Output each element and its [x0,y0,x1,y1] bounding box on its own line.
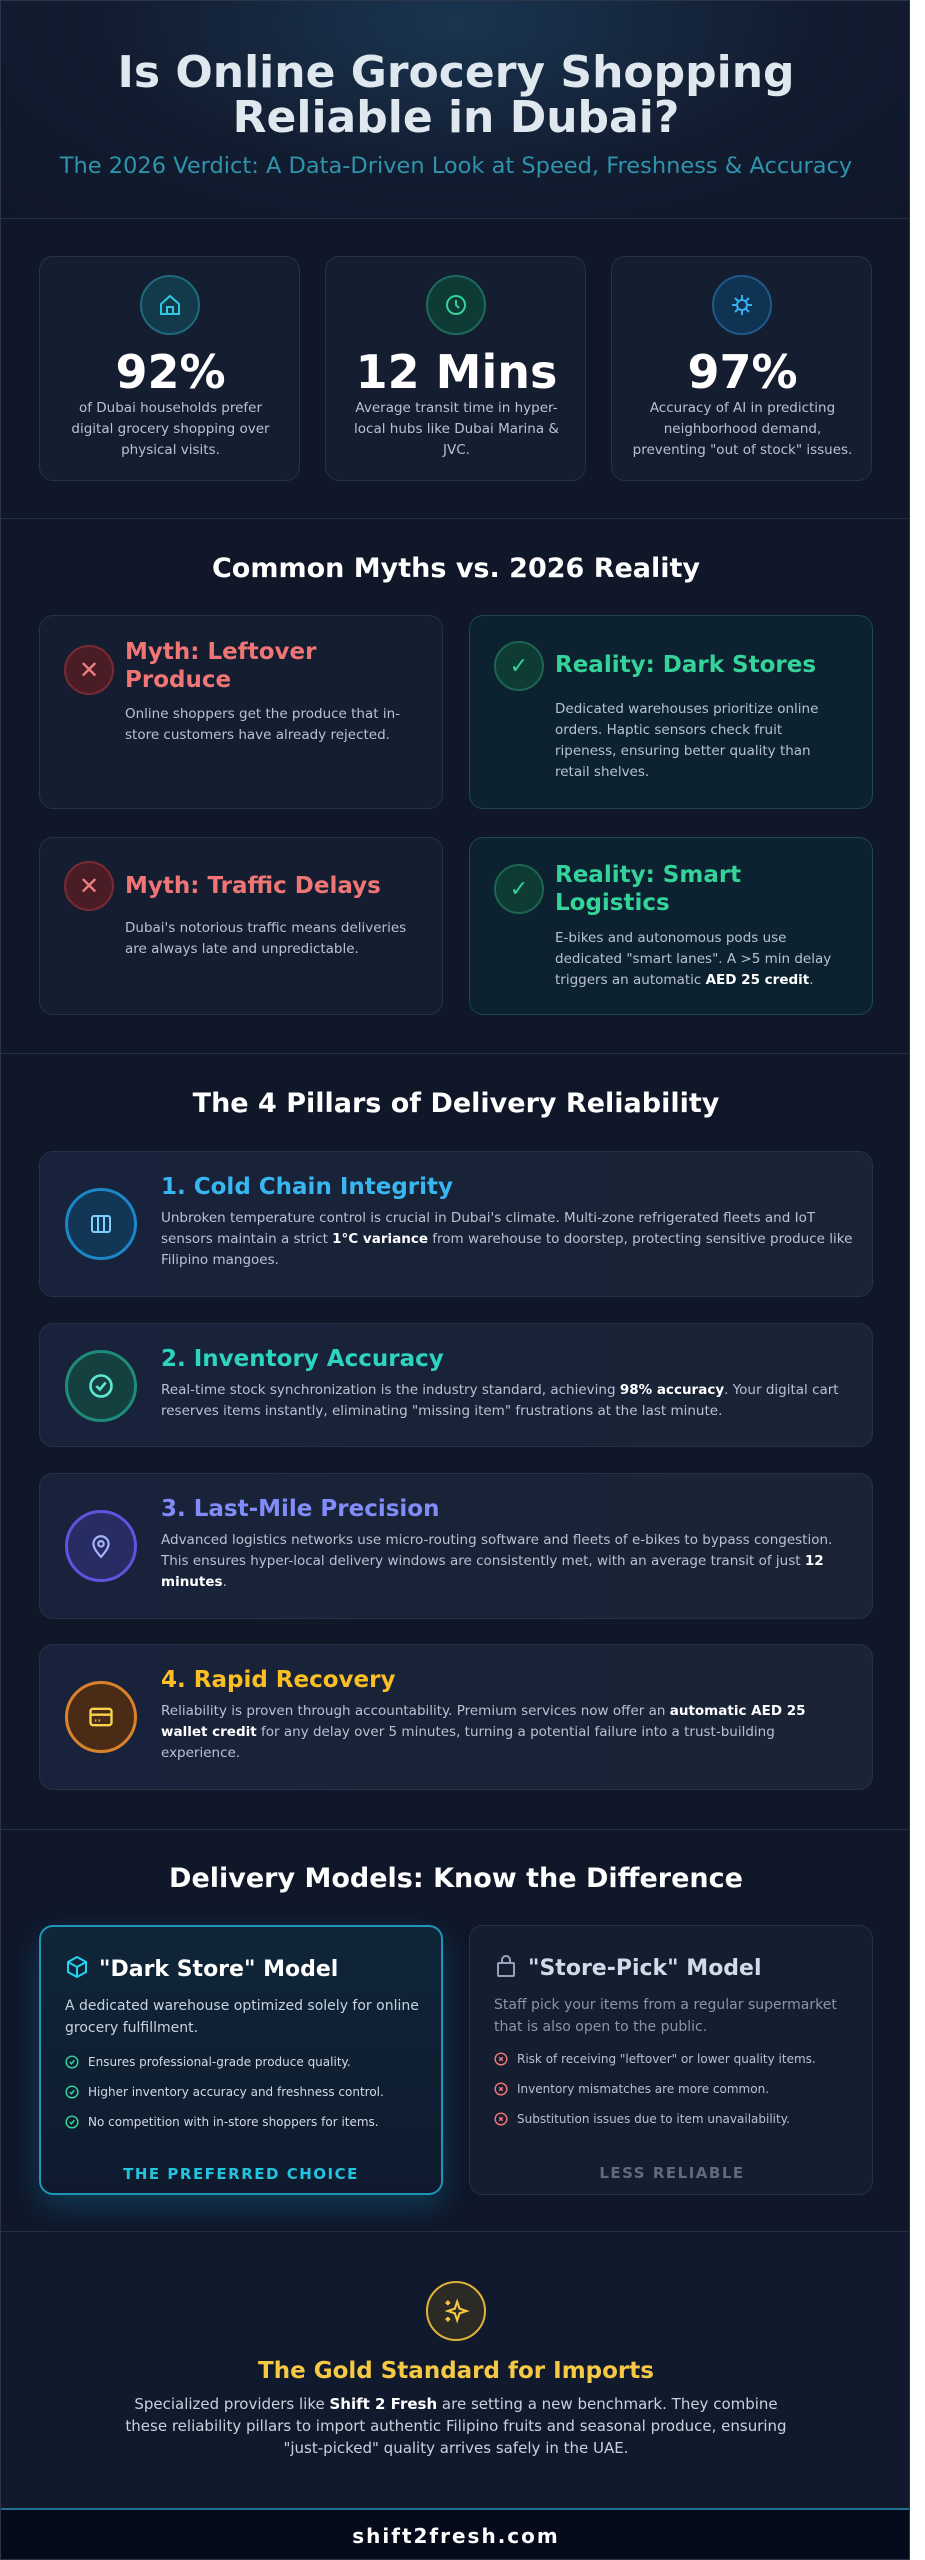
reality text: Dedicated warehouses prioritize online orders. Haptic sensors check fruit ripeness, ensuring better quality than retail shelves. [555,701,818,780]
icon: x: ✕ [79,656,99,684]
stat card 1 [39,256,300,481]
stat description: of Dubai households prefer digital grocery shopping over physical visits. [71,400,270,458]
heading: myths: Common Myths vs. 2026 Reality [212,553,700,584]
myth title: Myth: Leftover Produce [125,639,316,693]
reality title: Reality: Smart Logistics [555,862,741,916]
footer text: shift2fresh.com [352,2524,560,2548]
bullets: Higher inventory accuracy and freshness control. [88,2085,384,2099]
gold title: The Gold Standard for Imports [258,2358,654,2384]
icon: pin [65,1510,137,1582]
icon: house [140,275,200,335]
heading: delivery models: Delivery Models: Know the Difference [169,1863,743,1894]
title: Is Online Grocery Shopping [117,47,795,98]
icon: wallet card [65,1681,137,1753]
bullets: Ensures professional-grade produce quality. [88,2055,351,2069]
icon: clock [426,275,486,335]
bullets: Inventory mismatches are more common. [517,2082,769,2096]
icon: check [494,641,544,691]
icon: cube + title: "Dark Store" Model [99,1957,338,1982]
icon: check circle [65,1350,137,1422]
icon: check: ✓ [510,876,528,902]
stat description: Accuracy of AI in predicting neighborhood demand, preventing "out of stock" issues. [633,400,852,458]
icon: bag + title: "Store-Pick" Model [528,1956,762,1981]
icon: chip [712,275,772,335]
pillar 4 [39,1644,873,1790]
reality card 1 [469,615,873,809]
description: A dedicated warehouse optimized solely for online grocery fulfillment. [65,1998,419,2036]
icon: sparkle [426,2281,486,2341]
myth text: Dubai's notorious traffic means deliveries are always late and unpredictable. [125,920,406,957]
pillar title: 1. Cold Chain Integrity [161,1174,453,1200]
subtitle: The 2026 Verdict: A Data-Driven Look at Speed, Freshness & Accuracy [60,153,852,179]
header [1,1,911,219]
bullets: No competition with in-store shoppers for items. [88,2115,379,2129]
gold text: Specialized providers like Shift 2 Fresh are setting a new benchmark. They combine these reliability pillars to import authentic Filipino fruits and seasonal produce, ensuring "just-picked" quality arrives safely in the UAE. [125,2395,787,2457]
gold standard section [1,2232,911,2508]
pillar title: 3. Last-Mile Precision [161,1496,439,1522]
pillar text: Real-time stock synchronization is the industry standard, achieving 98% accuracy. Your digital cart reserves items instantly, eliminating "missing item" frustrations at the last minute. [161,1382,839,1419]
stat number: 12 Mins [356,345,557,399]
dark store card [39,1925,443,2195]
reality text: E-bikes and autonomous pods use dedicated "smart lanes". A >5 min delay triggers an automatic AED 25 credit. [555,930,831,988]
icon: x: ✕ [79,872,99,900]
myth card 2 [39,837,443,1015]
stat description: Average transit time in hyper-local hubs like Dubai Marina & JVC. [354,400,559,458]
icon: check [494,864,544,914]
stat number: 92% [115,345,226,399]
description: Staff pick your items from a regular supermarket that is also open to the public. [494,1997,837,2035]
pillar title: 4. Rapid Recovery [161,1667,395,1693]
myth title: Myth: Traffic Delays [125,873,381,899]
reality title: Reality: Dark Stores [555,652,816,678]
bullets [494,2052,816,2126]
reality card 2 [469,837,873,1015]
stat number: 97% [687,345,798,399]
icon: x [64,861,114,911]
icon: check: ✓ [510,654,528,678]
heading: pillars: The 4 Pillars of Delivery Reliability [193,1088,719,1119]
bullets: Substitution issues due to item unavailability. [517,2112,790,2126]
footer [1,2508,911,2560]
bullets [65,2055,384,2129]
label: THE PREFERRED CHOICE [123,2165,359,2183]
pillar 3 [39,1473,873,1619]
icon: cold chain [65,1188,137,1260]
pillar title: 2. Inventory Accuracy [161,1346,444,1372]
bullets: Risk of receiving "leftover" or lower quality items. [517,2052,816,2066]
title [117,47,795,143]
pillar text: Reliability is proven through accountability. Premium services now offer an automatic AED 25 wallet credit for any delay over 5 minutes, turning a potential failure into a trust-building experience. [161,1703,806,1761]
myth text: Online shoppers get the produce that in-store customers have already rejected. [125,706,400,743]
stat card 2 [325,256,586,481]
title: Reliable in Dubai? [233,92,679,143]
stat card 3 [611,256,872,481]
label: LESS RELIABLE [599,2164,745,2182]
pillar text: Advanced logistics networks use micro-routing software and fleets of e-bikes to bypass congestion. This ensures hyper-local delivery windows are consistently met, with an average transit of just 12 minutes. [161,1532,832,1590]
store pick card [469,1925,873,2195]
pillar text: Unbroken temperature control is crucial in Dubai's climate. Multi-zone refrigerated fleets and IoT sensors maintain a strict 1°C variance from warehouse to doorstep, protecting sensitive produce like Filipino mangoes. [161,1210,852,1268]
pillar 1 [39,1151,873,1297]
icon: x [64,645,114,695]
pillar 2 [39,1323,873,1447]
myth card 1 [39,615,443,809]
